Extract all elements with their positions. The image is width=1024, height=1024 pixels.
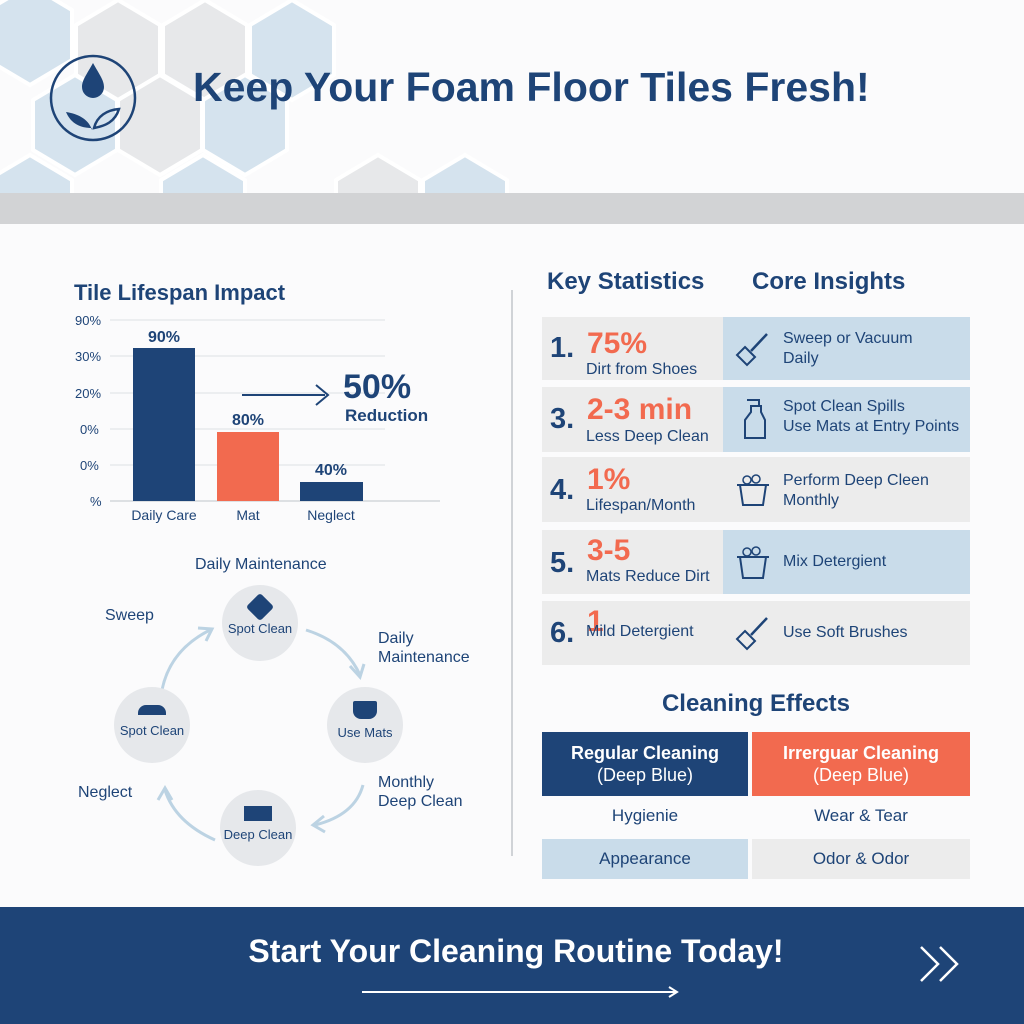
- bar chart: 40%: [315, 462, 347, 479]
- header: regular cleaning: Regular Cleaning: [571, 743, 719, 763]
- header: irregular cleaning: Irrerguar Cleaning: [783, 743, 939, 763]
- label: daily maintenance right: [378, 630, 470, 666]
- bar chart: Daily Care: [131, 507, 197, 523]
- heading: cleaning effects: Cleaning Effects: [662, 690, 850, 717]
- header: irregular cleaning: (Deep Blue): [813, 765, 909, 785]
- stat row 3: Monthly: [783, 492, 839, 509]
- footer banner: [0, 907, 1024, 1024]
- stat row 2: 2-3 min: [587, 393, 692, 426]
- icon: chevrons: [920, 946, 959, 982]
- node: use mats: [327, 687, 403, 763]
- table: cleaning effects: [542, 732, 970, 879]
- label: daily maintenance top: Daily Maintenance: [195, 556, 327, 573]
- bar chart: 20%: [75, 386, 101, 401]
- stat row 5: [542, 601, 970, 665]
- stat row 2: Use Mats at Entry Points: [783, 418, 959, 435]
- table: cleaning effects: Wear & Tear: [814, 806, 908, 825]
- label: daily maintenance right: Daily: [378, 630, 414, 647]
- bar chart: 90%: [75, 313, 101, 328]
- node: spot clean top: [222, 585, 298, 661]
- stat row 1: Dirt from Shoes: [586, 361, 697, 378]
- bar chart: 90%: [148, 329, 180, 346]
- stat row 1: Sweep or Vacuum: [783, 330, 913, 347]
- node: spot clean top: Spot Clean: [228, 621, 292, 636]
- cycle diagram: [78, 556, 470, 866]
- stat row 3: Lifespan/Month: [586, 497, 695, 514]
- bar chart: 0%: [80, 422, 99, 437]
- stat row 2: Less Deep Clean: [586, 428, 709, 445]
- stat row 4: [542, 530, 970, 594]
- bar chart: %: [90, 494, 102, 509]
- stat row 5: 1: [587, 605, 604, 638]
- icon: logo drop and leaves: [50, 54, 136, 142]
- bar chart: 0%: [80, 458, 99, 473]
- stat row 3: 4.: [550, 474, 574, 506]
- divider: [511, 290, 513, 856]
- stat row 4: Mats Reduce Dirt: [586, 568, 710, 585]
- stat row 4: 5.: [550, 547, 574, 579]
- stat row 5: 6.: [550, 617, 574, 649]
- node: use mats: Use Mats: [338, 725, 392, 740]
- label: neglect: Neglect: [78, 784, 132, 801]
- node: deep clean: Deep Clean: [224, 827, 292, 842]
- stat row 4: 3-5: [587, 534, 630, 567]
- stat row 4: Mix Detergient: [783, 553, 886, 570]
- label: daily maintenance right: Maintenance: [378, 649, 470, 666]
- footer text: Start Your Cleaning Routine Today!: [248, 933, 784, 969]
- label: monthly deep clean: Deep Clean: [378, 793, 462, 810]
- bar chart: 80%: [232, 412, 264, 429]
- stat row 1: [542, 317, 970, 380]
- stat row 2: [542, 387, 970, 452]
- label: sweep: Sweep: [105, 607, 154, 624]
- stat row 1: 75%: [587, 327, 647, 360]
- cycle arrows: [156, 626, 366, 842]
- bar chart: 30%: [75, 349, 101, 364]
- header: regular cleaning: [542, 732, 748, 796]
- footer arrow: [362, 986, 679, 998]
- table: cleaning effects: Appearance: [599, 849, 691, 868]
- gray band: [0, 193, 1024, 224]
- title: Keep Your Foam Floor Tiles Fresh!: [193, 64, 870, 110]
- bar chart: 50%: [343, 368, 411, 406]
- stat row 3: [542, 457, 970, 522]
- stat row 3: Perform Deep Cleen: [783, 472, 929, 489]
- label: monthly deep clean: [378, 774, 462, 810]
- stat row 1: 1.: [550, 332, 574, 364]
- stat row 1: Daily: [783, 350, 819, 367]
- stat row 2: Spot Clean Spills: [783, 398, 905, 415]
- header: regular cleaning: (Deep Blue): [597, 765, 693, 785]
- table: cleaning effects: Odor & Odor: [813, 849, 909, 868]
- header: irregular cleaning: [752, 732, 970, 796]
- bar chart: [75, 313, 440, 523]
- stat row 3: 1%: [587, 463, 630, 496]
- heading: tile lifespan impact: Tile Lifespan Impact: [74, 280, 285, 305]
- node: deep clean: [220, 790, 296, 866]
- bar chart: Neglect: [307, 507, 355, 523]
- table: cleaning effects: Hygienie: [612, 806, 678, 825]
- label: monthly deep clean: Monthly: [378, 774, 434, 791]
- stat row 5: Mild Detergient: [586, 623, 694, 640]
- heading: core insights: Core Insights: [752, 268, 905, 295]
- stat row 2: 3.: [550, 403, 574, 435]
- node: spot clean left: Spot Clean: [120, 723, 184, 738]
- heading: key statistics: Key Statistics: [547, 268, 704, 295]
- header hexagon background: [0, 0, 505, 193]
- stat row 5: Use Soft Brushes: [783, 624, 908, 641]
- node: spot clean left: [114, 687, 190, 763]
- bar chart: Reduction: [345, 406, 428, 425]
- bar chart: Mat: [236, 507, 260, 523]
